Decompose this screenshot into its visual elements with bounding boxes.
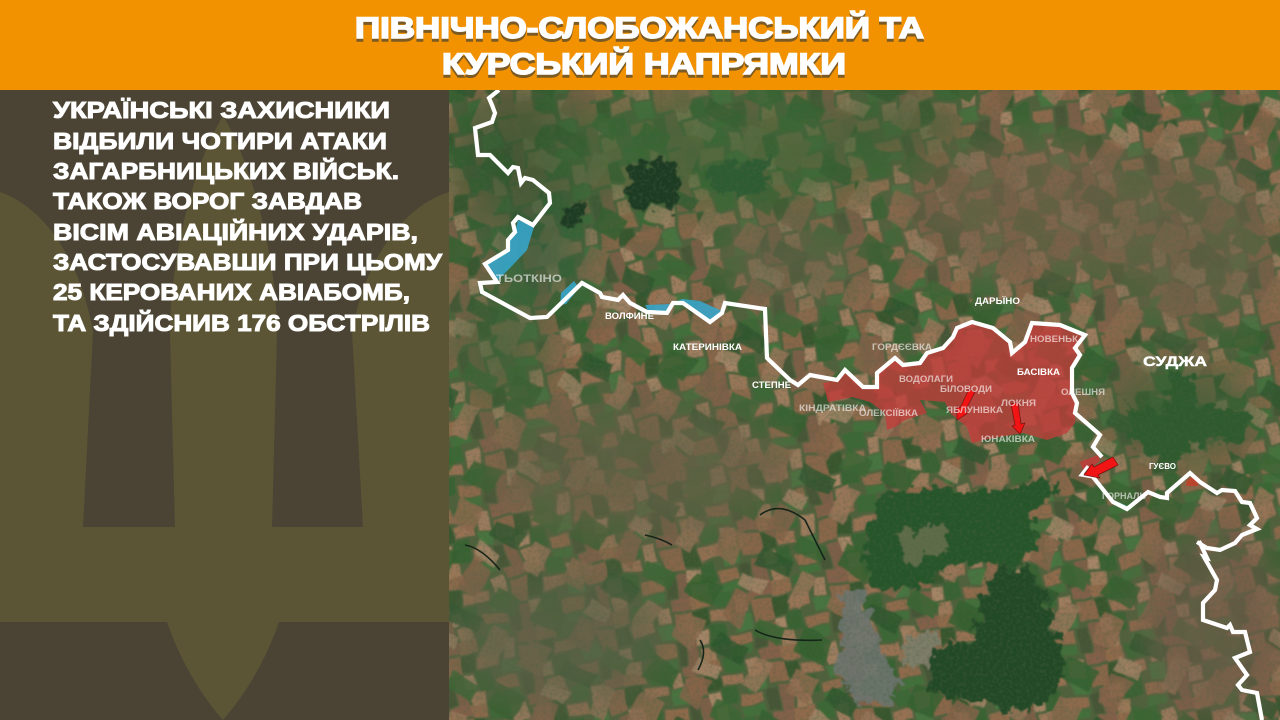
map labels (496, 273, 1207, 502)
map labels: ГОРНАЛЬ (1102, 491, 1146, 502)
map labels: БІЛОВОДИ (940, 384, 992, 395)
text block: summary: ВІДБИЛИ ЧОТИРИ АТАКИ (53, 128, 387, 154)
title (355, 11, 924, 84)
map labels: ВОДОЛАГИ (899, 374, 953, 385)
map labels: ЮНАКІВКА (981, 434, 1035, 445)
border line (475, 90, 1262, 720)
map labels: НОВЕНЬК (1030, 334, 1078, 345)
title: ПІВНІЧНО-СЛОБОЖАНСЬКИЙ ТА (355, 14, 924, 48)
map labels: ВОЛФИНЕ (605, 311, 654, 322)
map labels: КАТЕРИНІВКА (673, 342, 742, 353)
blue water areas (486, 220, 1137, 510)
icon: trident emblem (0, 116, 449, 720)
title: КУРСЬКИЙ НАПРЯМКИ (442, 50, 846, 84)
panel: left background (0, 90, 449, 720)
map labels: ГОРДЄЄВКА (872, 342, 932, 353)
text block: summary (53, 97, 443, 336)
map labels: СУДЖА (1143, 353, 1207, 369)
map labels: ОЛЕКСІЇВКА (859, 408, 918, 419)
map texture: field patches (430, 70, 1280, 720)
map labels: ДАРЬЇНО (975, 296, 1020, 307)
map labels: ОЛЕШНЯ (1061, 387, 1105, 398)
text block: summary: ЗАГАРБНИЦЬКИХ ВІЙСЬК. (53, 157, 399, 184)
map labels: КІНДРАТІВКА (799, 403, 866, 414)
map labels: ТЬОТКІНО (496, 273, 563, 285)
text block: summary: ЗАСТОСУВАВШИ ПРИ ЦЬОМУ (53, 249, 443, 275)
rivers (465, 509, 825, 670)
map labels: ЯБЛУНІВКА (946, 405, 1003, 416)
red occupied area (823, 322, 1199, 486)
text block: summary: ТАКОЖ ВОРОГ ЗАВДАВ (53, 188, 362, 214)
text block: summary: 25 КЕРОВАНИХ АВІАБОМБ, (53, 279, 410, 305)
attack arrows (957, 389, 1118, 478)
forests and city (560, 160, 1247, 713)
text block: summary: УКРАЇНСЬКІ ЗАХИСНИКИ (53, 97, 390, 123)
panel: satellite map (430, 70, 1280, 720)
title: КУРСЬКИЙ НАПРЯМКИ (442, 47, 846, 81)
title: ПІВНІЧНО-СЛОБОЖАНСЬКИЙ ТА (355, 11, 924, 45)
map labels: БАСІВКА (1017, 367, 1060, 378)
header bar (0, 0, 1280, 90)
map labels: СТЕПНЕ (752, 380, 791, 391)
text block: summary: ТА ЗДІЙСНИВ 176 ОБСТРІЛІВ (53, 309, 430, 336)
text block: summary: ВІСІМ АВІАЦІЙНИХ УДАРІВ, (53, 218, 418, 245)
map labels: ГУЄВО (1149, 461, 1176, 471)
map labels: ЛОКНЯ (1001, 398, 1036, 409)
